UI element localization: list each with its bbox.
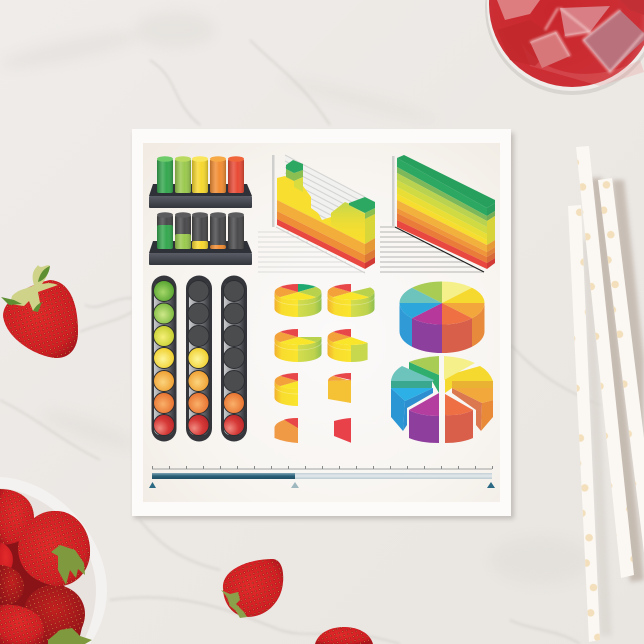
traffic-light tube: seven lit — [152, 276, 176, 442]
strawberry: bottom edge — [315, 627, 373, 644]
large 3D pie: whole — [400, 282, 484, 353]
traffic-light tube: two lit — [221, 276, 247, 442]
slice: purple — [409, 393, 439, 443]
small pie: row 3 left — [274, 373, 298, 406]
chart axes and floor lines — [380, 156, 484, 272]
marker: end — [487, 482, 495, 488]
stepped isometric bar chart — [258, 155, 375, 273]
full isometric band chart — [380, 155, 495, 272]
marker: start — [149, 482, 156, 488]
marker: middle — [291, 482, 299, 488]
small pie: row 1 left, full — [274, 284, 322, 317]
small pie: row 1 right — [328, 284, 374, 317]
bowl berry leaves — [48, 545, 92, 644]
level: green — [157, 212, 173, 249]
chart grid: back wall and floor — [258, 155, 365, 273]
chart right end — [487, 203, 495, 269]
level: lime — [175, 212, 191, 249]
level: yellow — [192, 212, 208, 249]
chart front bands — [397, 158, 487, 269]
pie top face — [400, 282, 484, 324]
strawberry: bottom — [221, 559, 283, 618]
shelf: top — [149, 184, 252, 208]
chart right end — [365, 208, 375, 269]
cylinder: red — [228, 156, 244, 193]
traffic-light tube: four lit — [186, 276, 212, 442]
cylinder: yellow — [192, 156, 208, 193]
small pie: row 4 right — [334, 418, 351, 443]
slider fill — [152, 473, 295, 479]
large 3D pie: exploded — [391, 356, 493, 443]
straw: long centre — [576, 146, 634, 578]
cylinder: green — [157, 156, 173, 193]
slice: teal — [391, 366, 434, 388]
slice: pale yellow — [444, 356, 475, 380]
level: empty — [228, 212, 244, 249]
cylinders on shelf: full — [149, 156, 252, 208]
small pie: row 2 right — [328, 329, 368, 362]
green cap: left column — [286, 160, 303, 192]
slice: yellow — [445, 366, 493, 393]
pie side wall — [400, 303, 484, 353]
napkin — [132, 129, 514, 519]
small pie: row 4 left — [274, 418, 298, 443]
strawberry: left — [1, 265, 78, 358]
slice: red — [445, 394, 473, 443]
small pie: row 3 right — [328, 373, 351, 403]
small pie: row 2 left — [274, 329, 322, 362]
straw: right — [598, 178, 644, 553]
chart top face — [397, 155, 495, 208]
ruler — [152, 468, 493, 469]
slider track — [152, 473, 492, 479]
slice: blue — [391, 388, 433, 431]
white bowl of strawberries — [0, 477, 107, 644]
paper straws — [568, 146, 644, 642]
cylinders on shelf: levels — [149, 212, 252, 265]
slice: orange — [452, 388, 493, 431]
green cap: right column — [349, 197, 375, 213]
shelf: bottom — [149, 241, 252, 265]
level: orange — [210, 212, 226, 249]
drinking glass with red drink and ice — [485, 0, 644, 95]
bowl berries — [0, 489, 90, 644]
straw: left — [568, 205, 600, 642]
slider with ruler — [149, 468, 495, 488]
cylinder: lime — [175, 156, 191, 193]
slice: lime — [409, 356, 439, 393]
napkin inner panel — [143, 143, 500, 502]
cylinder: orange — [210, 156, 226, 193]
